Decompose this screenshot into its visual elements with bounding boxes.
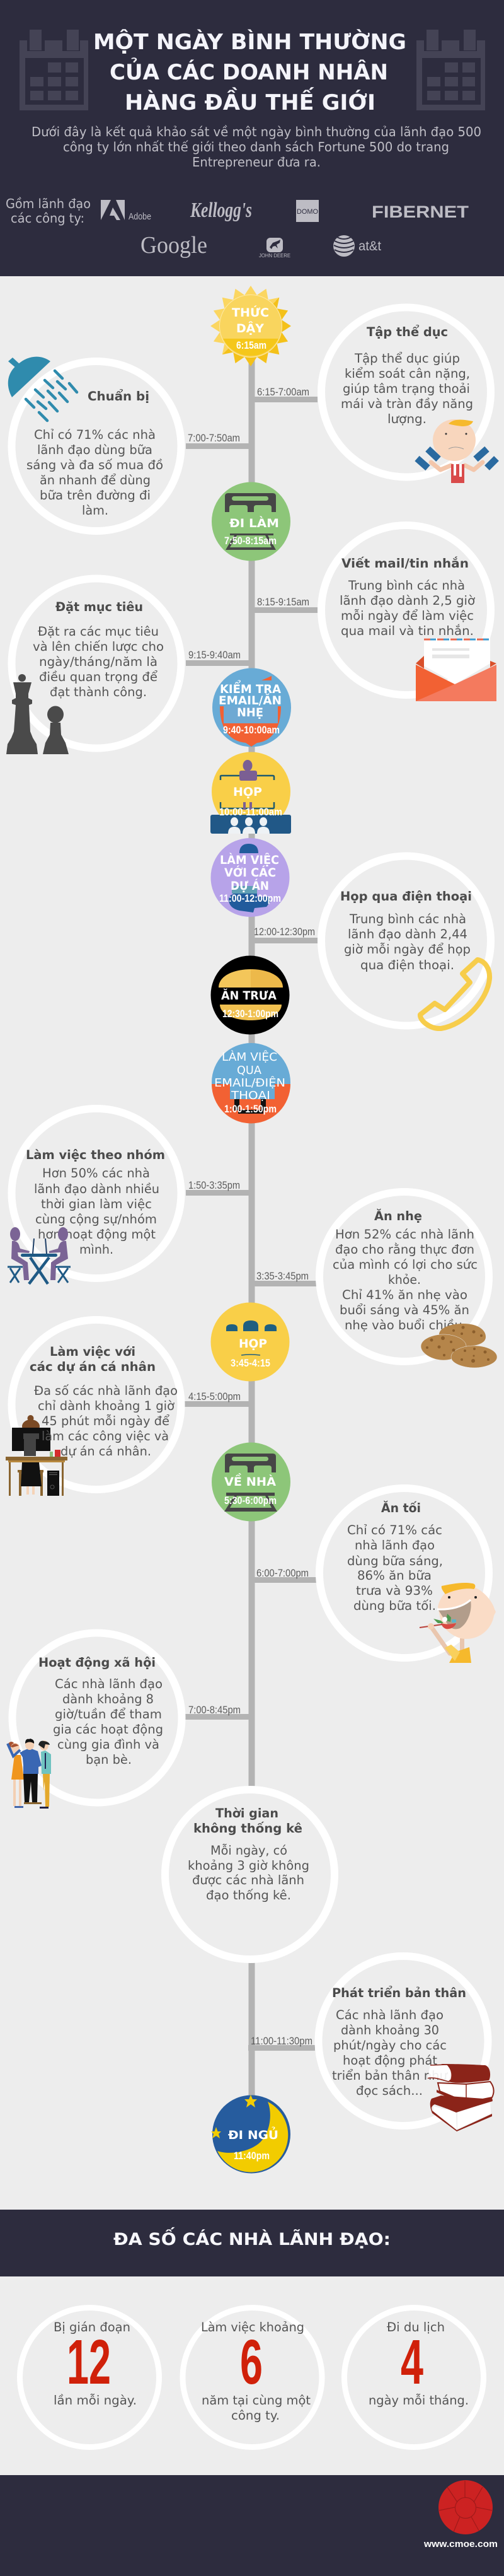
stat: years at company: Làm việc khoảng <box>201 2320 304 2334</box>
connector 4:15 <box>183 1391 249 1407</box>
icon: shower <box>8 357 77 421</box>
node: meeting: HỌP <box>233 786 262 799</box>
card: prepare: làm. <box>82 503 108 518</box>
card: goals: Đặt ra các mục tiêu <box>38 624 159 639</box>
connector 6:00: 6:00-7:00pm <box>256 1568 309 1579</box>
card: snack: Hơn 52% các nhà lãnh <box>335 1227 474 1242</box>
title: HÀNG ĐẦU THẾ GIỚI <box>125 87 375 115</box>
band: summary heading: ĐA SỐ CÁC NHÀ LÃNH ĐẠO: <box>113 2227 391 2249</box>
card: teamwork: thời gian làm việc <box>41 1197 152 1211</box>
node: check email: KIỂM TRA <box>220 680 282 696</box>
card: dinner: dùng bữa tối. <box>353 1599 436 1613</box>
card: individual projects: Đa số các nhà lãnh đạo <box>34 1384 178 1398</box>
card: individual projects <box>6 1320 181 1496</box>
card: self development: Phát triển bản thân <box>332 1986 466 2000</box>
card: untracked time: không thống kê <box>193 1821 302 1836</box>
logo: CMOE <box>423 2480 498 2550</box>
card: untracked time: Thời gian <box>215 1806 278 1821</box>
node: email and phone work: EMAIL/ĐIỆN <box>214 1076 285 1090</box>
connector 9:15 <box>186 650 249 666</box>
logo: DOMO: DOMO <box>297 208 318 216</box>
icon: man with dumbbells <box>417 419 496 483</box>
title: MỘT NGÀY BÌNH THƯỜNG <box>93 29 406 55</box>
icon: bed <box>225 493 276 550</box>
card: snack: của mình có lợi cho sức <box>333 1257 478 1272</box>
card: email: qua mail và tin nhắn. <box>341 624 474 638</box>
node: wake up: 6:15am <box>236 340 266 351</box>
card: goals: đạt thành công. <box>50 685 147 699</box>
card: individual projects: 45 phút mỗi ngày để <box>42 1414 169 1428</box>
node: check email <box>212 668 291 747</box>
node: meeting 2 <box>210 1303 290 1381</box>
stat: years at company: năm tại cùng một <box>202 2393 311 2408</box>
card: teamwork: lãnh đạo dành nhiều <box>34 1182 159 1196</box>
card: individual projects: chỉ dành khoảng 1 giờ <box>38 1399 175 1413</box>
card: phone meeting: lãnh đạo dành 2,44 <box>348 927 467 941</box>
card: email <box>321 525 496 701</box>
card: email: Viết mail/tin nhắn <box>341 556 469 571</box>
icon: calendar right <box>416 30 485 110</box>
card: dinner: dùng bữa sáng, <box>347 1554 443 1568</box>
stat: travel: ngày mỗi tháng. <box>369 2393 469 2408</box>
card: untracked time: Mỗi ngày, có <box>210 1843 287 1858</box>
node: meeting <box>210 752 291 834</box>
card: individual projects: dự án cá nhân. <box>60 1444 151 1459</box>
connector 11:00: 11:00-11:30pm <box>251 2036 312 2047</box>
connector 4:15: 4:15-5:00pm <box>188 1391 241 1402</box>
icon: bed <box>224 1454 277 1512</box>
stat: years at company: 6 <box>240 2327 263 2398</box>
card: prepare: ăn nhanh để dùng <box>40 473 151 487</box>
card: teamwork: cùng cộng sự/nhóm <box>35 1212 157 1227</box>
node: email and phone work <box>212 1043 290 1124</box>
node: email and phone work: THOẠI <box>231 1090 270 1102</box>
card: untracked time <box>165 1790 335 1959</box>
icon: meeting table <box>210 760 291 834</box>
connector 7:00pm <box>183 1705 249 1720</box>
card: phone meeting <box>321 856 491 1029</box>
stat: interruptions: lần mỗi ngày. <box>54 2393 137 2408</box>
stat: interruptions: 12 <box>67 2327 111 2398</box>
card: goals: điều quan trọng để <box>39 670 158 684</box>
card: social: giờ/tuần để tham <box>55 1707 162 1722</box>
stat: travel: Đi du lịch <box>387 2320 445 2334</box>
card: email: lãnh đạo dành 2,5 giờ <box>340 593 475 608</box>
node: work on projects: LÀM VIỆC <box>220 853 279 867</box>
card: exercise: Tập thể dục giúp <box>354 351 460 366</box>
connector 7:00pm: 7:00-8:45pm <box>188 1705 241 1716</box>
node: meeting 2: HỌP <box>239 1338 267 1351</box>
stat: years at company <box>183 2308 322 2447</box>
node: go to work <box>212 482 290 561</box>
card: prepare <box>8 357 181 531</box>
logo: Adobe: Adobe <box>129 211 151 222</box>
card: social: Các nhà lãnh đạo <box>55 1677 163 1691</box>
node: go to work: 7:50-8:15am <box>224 535 277 547</box>
card: prepare: Chuẩn bị <box>88 389 149 404</box>
card: self development: đọc sách... <box>356 2084 423 2098</box>
card: exercise: giúp tâm trạng thoải <box>343 382 470 396</box>
logo: Google: Google <box>140 232 207 259</box>
connector 12:00: 12:00-12:30pm <box>254 926 315 938</box>
card: phone meeting: Trung bình các nhà <box>349 912 466 926</box>
node: work on projects <box>210 838 290 917</box>
connector 6:15: 6:15-7:00am <box>257 387 309 398</box>
companies label: các công ty: <box>11 211 84 226</box>
icon: woman at desk <box>6 1415 67 1496</box>
band: summary heading <box>0 2210 504 2276</box>
logo: John Deere: JOHN DEERE <box>259 253 290 259</box>
card: dinner <box>319 1488 496 1663</box>
icon: two people at table <box>8 1227 71 1284</box>
logo: AT&T <box>333 235 381 257</box>
card: teamwork: Hơn 50% các nhà <box>42 1166 150 1180</box>
timeline <box>183 358 318 2098</box>
card: email: Trung bình các nhà <box>348 578 465 593</box>
card: social: dành khoảng 8 <box>62 1692 154 1706</box>
stat: years at company: công ty. <box>231 2408 280 2423</box>
node: sleep: ĐI NGỦ <box>228 2127 278 2142</box>
card: teamwork <box>8 1109 181 1284</box>
card: social: cùng gia đình và <box>57 1737 159 1752</box>
node: meeting: 10:00-11:00am <box>219 807 282 818</box>
connector 9:15: 9:15-9:40am <box>188 650 241 661</box>
connector 8:15: 8:15-9:15am <box>257 597 309 608</box>
node: check email: 9:40-10:00am <box>223 725 280 736</box>
card: teamwork: mình. <box>79 1242 113 1257</box>
node: check email: EMAIL/ĂN <box>219 694 282 708</box>
card: exercise <box>321 308 496 483</box>
card: dinner: 86% ăn bữa <box>357 1568 432 1583</box>
card: untracked time: được các nhà lãnh <box>192 1873 304 1887</box>
card: social: Hoạt động xã hội <box>38 1655 156 1670</box>
node: wake up: THỨC <box>232 306 269 320</box>
node: lunch <box>210 956 290 1034</box>
card: untracked time: khoảng 3 giờ không <box>188 1858 309 1873</box>
connector 7:00: 7:00-7:50am <box>188 433 240 444</box>
card: email: mỗi ngày để làm việc <box>341 609 474 623</box>
card: prepare: lãnh đạo dùng bữa <box>37 443 152 457</box>
card: snack: Chỉ 41% ăn nhẹ vào <box>342 1288 467 1302</box>
connector 1:50: 1:50-3:35pm <box>188 1180 240 1191</box>
icon: envelope <box>416 638 496 701</box>
card: social <box>8 1633 181 1809</box>
card: dinner: trưa và 93% <box>356 1583 433 1598</box>
card: teamwork: Làm việc theo nhóm <box>26 1148 165 1162</box>
node: wake up <box>210 286 291 366</box>
connector 3:35: 3:35-3:45pm <box>256 1271 309 1282</box>
card: snack <box>319 1192 497 1368</box>
logo: AT&T: at&t <box>358 239 381 254</box>
card: phone meeting: Họp qua điện thoại <box>340 889 472 904</box>
icon: stars <box>211 2095 257 2138</box>
connector 8:15 <box>255 597 318 613</box>
node: go home: 5:30-6:00pm <box>224 1495 277 1507</box>
card: dinner: nhà lãnh đạo <box>355 1538 435 1553</box>
card: goals: ngày/tháng/năm là <box>39 655 158 669</box>
node: meeting 2: 3:45-4:15 <box>231 1358 270 1369</box>
node: email and phone work: LÀM VIỆC <box>222 1050 277 1064</box>
intro text: Entrepreneur đưa ra. <box>192 154 321 170</box>
card: individual projects: các dự án cá nhân <box>30 1360 156 1374</box>
node: wake up: DẬY <box>236 322 265 335</box>
connector 6:15 <box>255 387 318 402</box>
logo: CMOE: www.cmoe.com <box>423 2539 498 2550</box>
card: exercise: lượng. <box>387 412 427 426</box>
card: phone meeting: qua điện thoại. <box>360 958 454 972</box>
stat: travel: 4 <box>401 2327 423 2398</box>
icon: cookies <box>421 1324 497 1368</box>
title <box>93 29 406 115</box>
card: individual projects: Làm việc với <box>50 1344 135 1359</box>
card: prepare: sáng và đa số mua đồ <box>26 458 163 472</box>
logo: Kellogg's: Kellogg's <box>190 199 252 222</box>
card: self development <box>319 1956 494 2131</box>
card: exercise: Tập thể dục <box>367 325 448 339</box>
card: goals: Đặt mục tiêu <box>55 600 143 614</box>
node: lunch: 12:30-1:00pm <box>222 1008 278 1020</box>
companies label: Gồm lãnh đạo <box>6 196 91 211</box>
icon: stack of books <box>428 2064 494 2131</box>
node: sleep: 11:40pm <box>234 2150 270 2162</box>
intro text: Dưới đây là kết quả khảo sát về một ngày bình thường của lãnh đạo 500 <box>32 124 481 139</box>
node: email and phone work: QUA <box>237 1064 261 1077</box>
icon: chess pieces <box>6 674 69 754</box>
card: exercise: kiểm soát cân nặng, <box>345 366 470 381</box>
card: snack: Ăn nhẹ <box>374 1208 422 1223</box>
stat: travel <box>344 2308 484 2447</box>
card: goals: và lên chiến lược cho <box>33 639 164 654</box>
card: prepare: Chỉ có 71% các nhà <box>34 428 156 442</box>
card: snack: khỏe. <box>388 1273 421 1287</box>
intro text <box>32 124 481 170</box>
node: go home: VỀ NHÀ <box>224 1474 277 1489</box>
card: social: gia các hoạt động <box>53 1722 163 1737</box>
node: lunch: ĂN TRƯA <box>221 989 277 1003</box>
companies label <box>6 196 91 226</box>
connector 7:00 <box>186 433 249 449</box>
logo: DOMO <box>296 200 319 222</box>
logo: Fibernet: FIBERNET <box>372 202 469 221</box>
connector 3:35 <box>255 1271 316 1286</box>
icon: three friends <box>8 1739 51 1809</box>
logo: Adobe <box>101 200 151 222</box>
card: self development: triển bản thân như <box>332 2068 449 2083</box>
card: self development: phút/ngày cho các <box>333 2038 447 2053</box>
icon: man eating <box>420 1583 496 1663</box>
logo: John Deere <box>259 238 290 259</box>
node: go to work: ĐI LÀM <box>229 516 279 530</box>
card: exercise: mái và tràn đầy năng <box>341 397 473 411</box>
node: work on projects: VỚI CÁC <box>224 866 276 880</box>
header panel <box>0 0 504 276</box>
card: self development: hoạt động phát <box>343 2053 437 2068</box>
card: untracked time: đạo thống kê. <box>206 1888 291 1903</box>
card: self development: Các nhà lãnh đạo <box>336 2008 444 2022</box>
intro text: công ty lớn nhất thế giới theo danh sách Fortune 500 do trang <box>63 139 449 154</box>
card: dinner: Ăn tối <box>381 1500 421 1515</box>
node: go home <box>212 1443 290 1521</box>
icon: phone <box>420 960 490 1029</box>
title: CỦA CÁC DOANH NHÂN <box>110 57 388 85</box>
card: phone meeting: giờ mỗi ngày để họp <box>344 942 471 957</box>
stat: interruptions <box>20 2308 159 2447</box>
card: individual projects: làm các công việc và <box>42 1429 169 1443</box>
connector 1:50 <box>186 1180 249 1196</box>
node: check email: NHẸ <box>237 706 263 720</box>
card: snack: nhẹ vào buổi chiều. <box>345 1318 466 1332</box>
card: teamwork: hơn hoạt động một <box>38 1227 156 1242</box>
node: sleep <box>211 2095 290 2173</box>
card: self development: dành khoảng 30 <box>341 2023 439 2037</box>
card: social: bạn bè. <box>86 1752 132 1767</box>
connector 11:00 <box>248 2036 315 2051</box>
card: dinner: Chỉ có 71% các <box>347 1523 442 1537</box>
footer band <box>0 2475 504 2576</box>
connector 12:00 <box>254 926 318 943</box>
card: snack: buổi sáng và 45% ăn <box>340 1303 469 1317</box>
node: work on projects: DỰ ÁN <box>231 879 269 893</box>
icon: calendar left <box>20 30 88 110</box>
card: snack: đạo cho rằng thực đơn <box>335 1242 474 1257</box>
stat: interruptions: Bị gián đoạn <box>54 2320 130 2334</box>
node: work on projects: 11:00-12:00pm <box>219 893 281 904</box>
node: email and phone work: 1:00-1:50pm <box>224 1104 277 1115</box>
card: goals <box>6 579 181 754</box>
card: prepare: bữa trên đường đi <box>40 488 151 503</box>
